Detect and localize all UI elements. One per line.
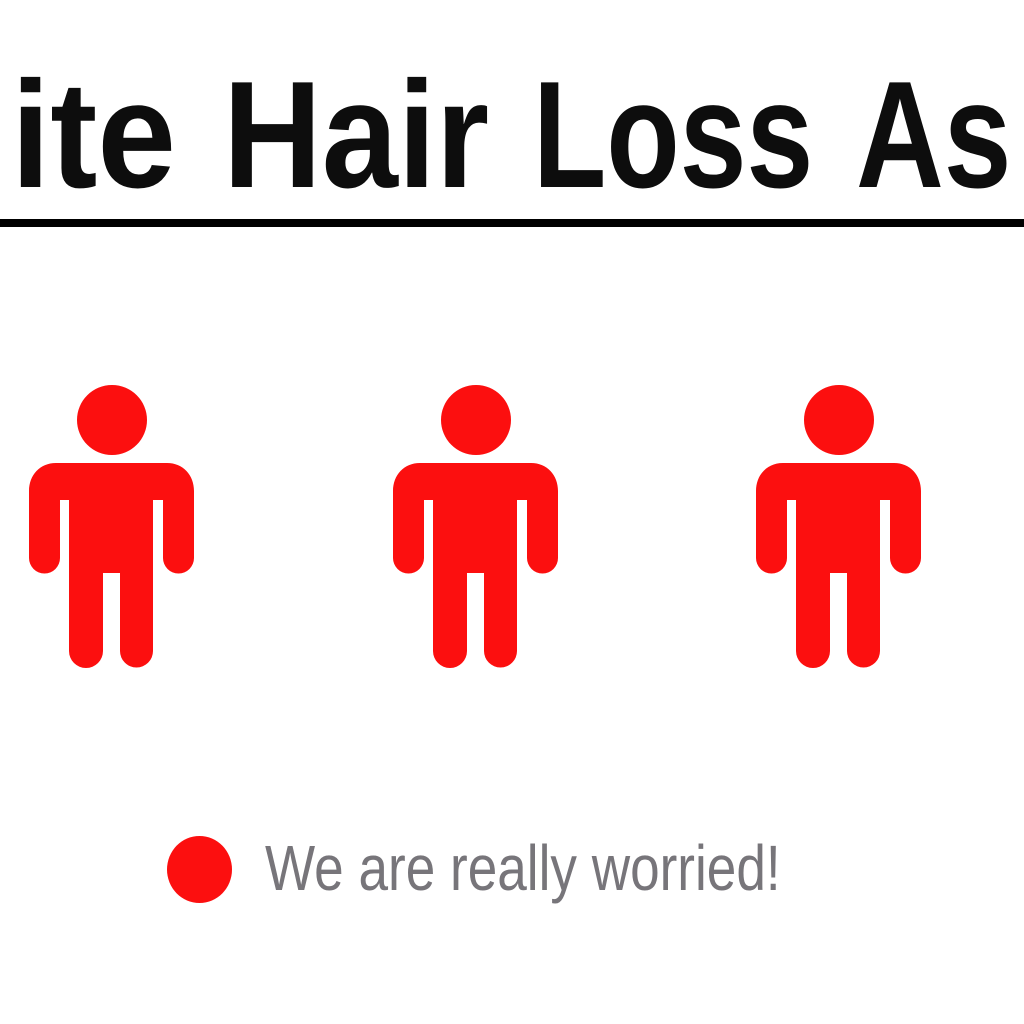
title: As <box>856 50 1011 220</box>
title underline <box>0 219 1024 227</box>
legend label: We are really worried! <box>265 832 781 904</box>
title: Loss <box>533 50 813 220</box>
title: Hair <box>223 50 489 220</box>
icon: red person 3 <box>756 385 921 668</box>
icon: red person 2 <box>393 385 558 668</box>
legend marker <box>167 836 232 903</box>
title <box>11 50 1011 220</box>
title: ite <box>11 50 176 220</box>
icon: red person 1 <box>29 385 194 668</box>
